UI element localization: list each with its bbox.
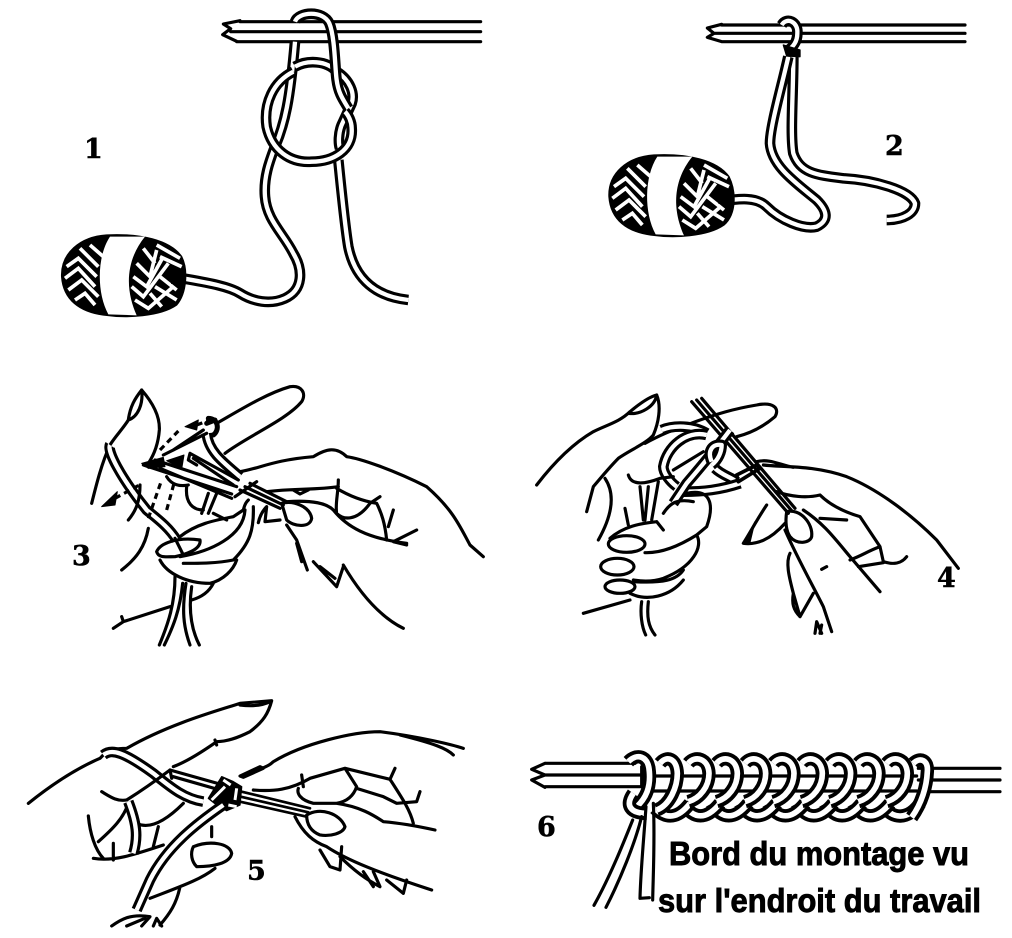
lower right fingers and nails (258, 507, 403, 628)
number 5: 5 (247, 856, 266, 887)
right needle (240, 792, 310, 817)
black shadowed nail (743, 505, 785, 544)
right hand (240, 450, 483, 557)
white knot details (212, 780, 237, 807)
nail shadow (743, 522, 755, 543)
lower finger oval (192, 843, 232, 867)
yarn down finger (128, 802, 136, 853)
middle finger sketch (167, 477, 227, 520)
panel 3: hands inserting the needle (92, 386, 483, 645)
wrist line (583, 600, 630, 613)
left hand holding yarn (157, 500, 253, 600)
left hand fingertips (601, 536, 645, 593)
panel 6: finished cast-on edge (532, 757, 1000, 907)
yarn tail (641, 602, 655, 635)
needle bars between loops (653, 776, 917, 791)
panel 1: yarn slip knot on needle (62, 14, 481, 317)
needle left (532, 763, 642, 787)
knot of stitches (208, 777, 242, 811)
yarn tails (594, 803, 654, 907)
caption (658, 835, 981, 919)
number 2: 2 (885, 131, 904, 162)
right fingertip (786, 511, 812, 542)
number 4: 4 (937, 563, 956, 594)
yarn ball 1 (62, 235, 186, 317)
lower right finger (785, 530, 832, 633)
wrist line (113, 607, 170, 628)
lower chain of stitches (655, 803, 920, 816)
knitting needles (143, 453, 287, 508)
needle right (918, 768, 1000, 792)
yarn loops (662, 427, 760, 503)
yarn over thumb (109, 445, 177, 540)
yarn strands 2 (718, 21, 915, 227)
right hand (757, 461, 958, 592)
yarn ball 2 (609, 155, 734, 237)
right fingertip (282, 502, 312, 525)
index finger (217, 386, 304, 453)
lower finger (112, 827, 215, 926)
right fingertip (307, 811, 345, 835)
index finger (28, 701, 272, 803)
left thumb with nail (537, 395, 659, 540)
caption line 2: sur l'endroit du travail (658, 882, 981, 919)
knitting needle (692, 398, 795, 513)
main yarn (137, 805, 223, 910)
lower right fingers (295, 817, 432, 893)
panel 5: pulling the new stitch (28, 701, 463, 926)
left needle (170, 770, 223, 790)
left hand fingers (610, 475, 710, 597)
needle 2 (707, 24, 965, 42)
yarn strands 1 (173, 14, 408, 302)
needle 1 (223, 21, 481, 42)
arrows (102, 420, 208, 518)
panel 4: hands wrapping the yarn (537, 395, 958, 635)
right hand (240, 732, 463, 830)
number 6: 6 (537, 812, 556, 843)
curved arm lines (122, 485, 148, 570)
needle tip (142, 457, 165, 468)
left hand (88, 770, 183, 860)
left thumb with nail (92, 390, 159, 503)
panel 2: yarn with tightened knot (609, 21, 965, 237)
caption line 1: Bord du montage vu (669, 835, 969, 872)
yarn around index finger (207, 418, 240, 477)
stitches on needle (628, 757, 927, 817)
number 3: 3 (72, 541, 91, 572)
number 1: 1 (84, 134, 103, 165)
yarn on finger (103, 752, 203, 802)
index finger (645, 404, 777, 443)
yarn tails (159, 577, 199, 645)
